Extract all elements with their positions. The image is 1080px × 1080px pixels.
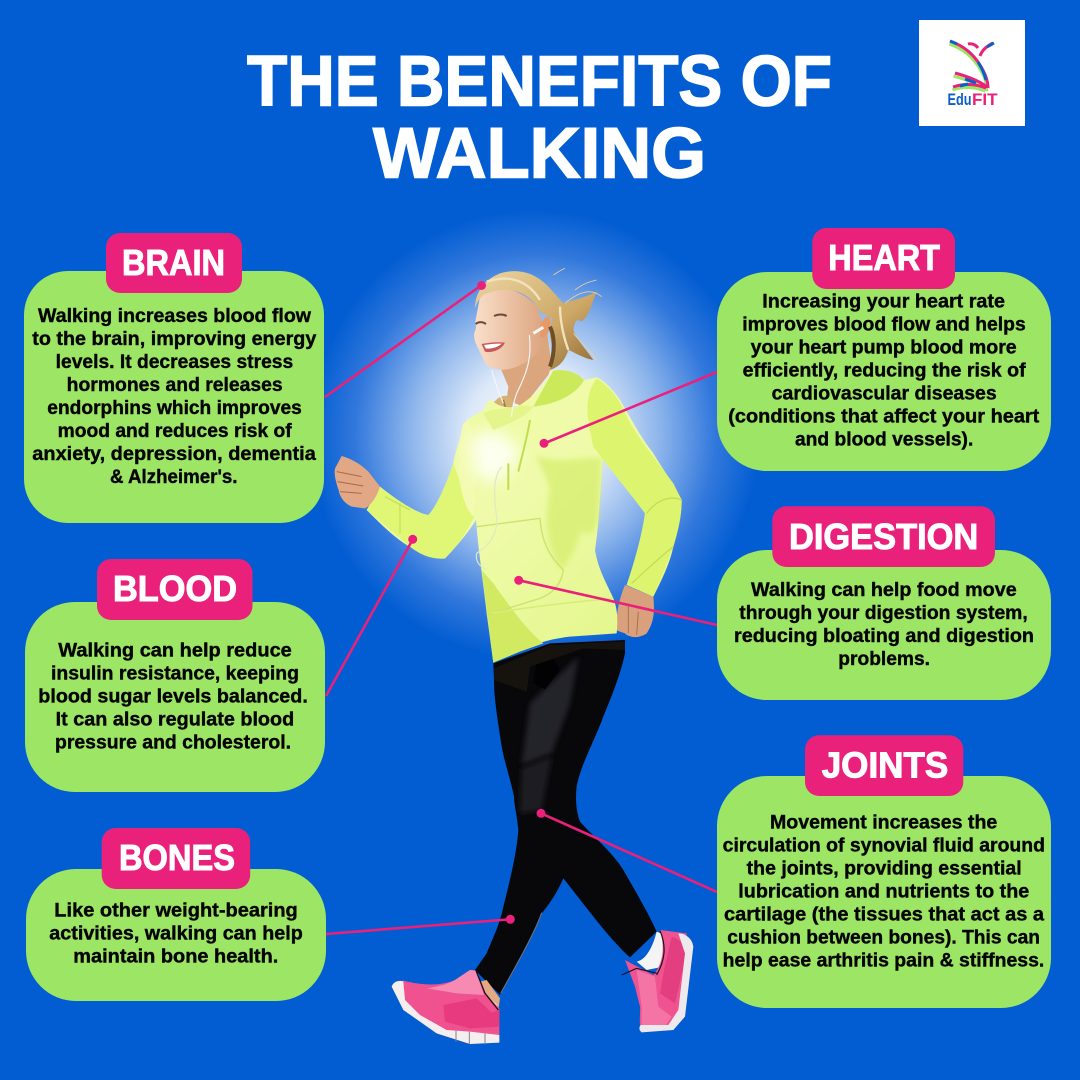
panel: brain: mood and reduces risk of: [58, 421, 292, 442]
leader line: digestion: [514, 576, 717, 625]
panel: heart: (conditions that affect your heart: [728, 407, 1040, 428]
panel: digestion: [717, 506, 1051, 700]
hoodie: neon yellow: [367, 370, 682, 663]
panel: bones: maintain bone health.: [73, 947, 278, 968]
panel: heart: Increasing your heart rate: [762, 292, 1005, 313]
panel: heart: HEART: [828, 237, 940, 278]
panel: bones: [26, 828, 326, 1001]
shoes: pink sneakers: [392, 930, 693, 1044]
earphone cable: [476, 327, 543, 570]
panel: brain: to the brain, improving energy: [32, 329, 317, 350]
neck and face: [474, 289, 552, 407]
hand: raised fist: [335, 456, 380, 508]
panel: brain: endorphins which improves: [47, 398, 302, 419]
walking woman figure: [335, 268, 693, 1044]
panel: heart: and blood vessels).: [795, 430, 973, 451]
panel: brain: BRAIN: [122, 242, 225, 283]
panel: joints: [717, 735, 1051, 1008]
panel: bones: Like other weight-bearing: [54, 901, 298, 922]
panel: blood: It can also regulate blood: [56, 710, 294, 731]
panel: joints: help ease arthritis pain & stiffness.: [723, 951, 1044, 972]
panel: blood: [25, 559, 325, 792]
panel: heart: efficiently, reducing the risk of: [743, 361, 1026, 382]
hair: blonde ponytail: [475, 268, 602, 453]
panel: heart: your heart pump blood more: [751, 338, 1017, 359]
panel: brain: hormones and releases: [67, 375, 283, 396]
panel: brain: [24, 233, 324, 523]
panel: digestion: Walking can help food move: [751, 580, 1017, 601]
background glow: [310, 210, 760, 660]
title: THE BENEFITS OF: [247, 42, 832, 122]
leader line: joints: [536, 809, 717, 892]
panel: heart: improves blood flow and helps: [742, 315, 1026, 336]
panel: bones: BONES: [119, 837, 235, 878]
title: WALKING: [373, 114, 706, 194]
leader line: blood: [326, 535, 417, 696]
panel: brain: anxiety, depression, dementia: [32, 444, 316, 465]
panel: digestion: DIGESTION: [789, 516, 978, 557]
panel: heart: [717, 228, 1051, 471]
title: [247, 42, 832, 194]
panel: blood: Walking can help reduce: [58, 641, 292, 662]
logo: EduFIT: Edu: [948, 90, 972, 109]
panel: digestion: through your digestion system,: [739, 603, 1028, 624]
panel: joints: cartilage (the tissues that act as a: [724, 905, 1044, 926]
panel: brain: & Alzheimer's.: [110, 467, 238, 488]
panel: joints: cushion between bones). This can: [727, 928, 1040, 949]
panel: joints: JOINTS: [822, 745, 948, 786]
panel: heart: cardiovascular diseases: [772, 384, 997, 405]
leader line: brain: [325, 281, 486, 397]
panel: blood: blood sugar levels balanced.: [38, 687, 308, 708]
panel: blood: pressure and cholesterol.: [55, 733, 291, 754]
leader line: heart: [540, 372, 717, 448]
panel: joints: circulation of synovial fluid around: [723, 836, 1045, 857]
panel: brain: levels. It decreases stress: [56, 352, 293, 373]
legs: black leggings: [475, 640, 657, 995]
panel: blood: insulin resistance, keeping: [51, 664, 299, 685]
panel: joints: the joints, providing essential: [747, 859, 1022, 880]
logo: EduFIT: FIT: [972, 90, 998, 109]
hand: behind hip: [616, 585, 654, 637]
panel: blood: BLOOD: [113, 568, 237, 609]
panel: digestion: problems.: [838, 649, 930, 670]
panel: digestion: reducing bloating and digestion: [734, 626, 1034, 647]
panel: joints: Movement increases the: [770, 813, 998, 834]
logo: EduFIT: [919, 20, 1025, 126]
panel: brain: Walking increases blood flow: [38, 306, 311, 327]
leader line: bones: [326, 915, 515, 934]
panel: joints: lubrication and nutrients to the: [738, 882, 1030, 903]
panel: bones: activities, walking can help: [49, 924, 303, 945]
